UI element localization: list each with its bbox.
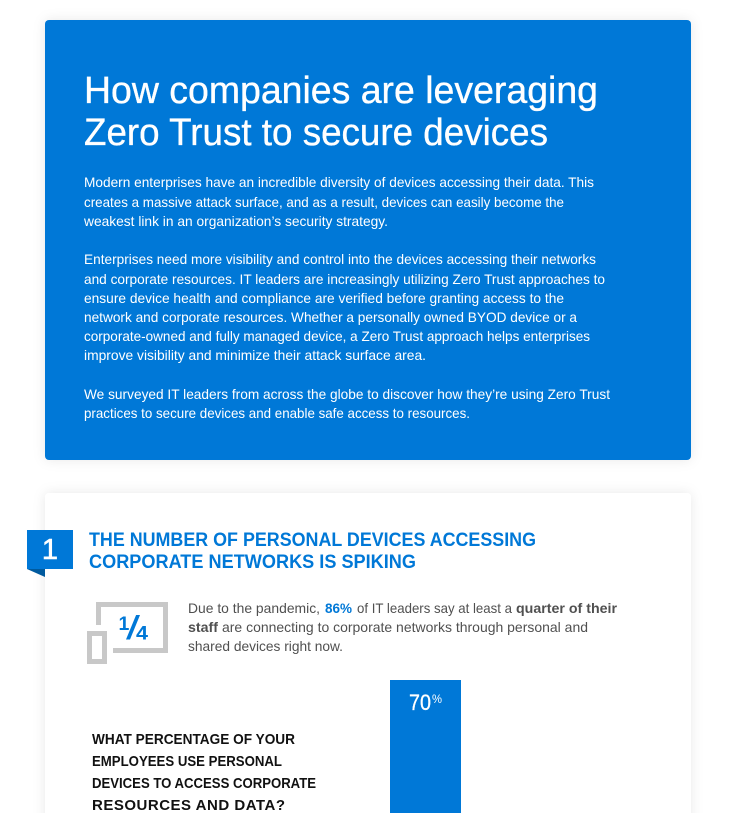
bar chart: 70 percent bar: % [432, 692, 442, 706]
text block: pandemic statistic: are connecting to corporate networks through personal and [222, 619, 588, 635]
panel: section 1 card [45, 493, 691, 813]
text block: intro paragraph 2: and corporate resources. IT leaders are increasingly utilizing Zero Trust approaches to [84, 271, 605, 287]
text block: intro paragraph 1 [83, 174, 594, 229]
survey question [92, 731, 316, 813]
bar chart: 70 percent bar: 70 [409, 690, 431, 715]
text block: pandemic statistic: Due to the pandemic, [188, 600, 320, 616]
text block: intro paragraph 1: weakest link in an organization’s security strategy. [83, 213, 388, 229]
text block: pandemic statistic [188, 600, 618, 654]
text block: intro paragraph 2: ensure device health and compliance are verified before granting access to the [84, 290, 564, 306]
title [84, 70, 598, 154]
number badge: 1 [42, 534, 58, 566]
title: Zero Trust to secure devices [84, 112, 548, 154]
text block: intro paragraph 2: Enterprises need more visibility and control into the devices accessing their networks [84, 251, 596, 267]
text block: intro paragraph 3: practices to secure devices and enable safe access to resources. [84, 405, 470, 421]
text block: pandemic statistic: shared devices right now. [188, 638, 343, 654]
survey question: WHAT PERCENTAGE OF YOUR [92, 731, 295, 748]
text block: pandemic statistic: staff [188, 619, 218, 635]
panel: introduction [45, 20, 691, 460]
section heading: THE NUMBER OF PERSONAL DEVICES ACCESSING [89, 530, 536, 551]
text block: intro paragraph 1: Modern enterprises have an incredible diversity of devices accessing their data. This [84, 174, 594, 190]
bar chart: 70 percent bar [390, 680, 461, 813]
text block: pandemic statistic: 86% [325, 600, 353, 616]
section heading: CORPORATE NETWORKS IS SPIKING [89, 552, 416, 573]
text block: intro paragraph 2: corporate-owned and fully managed device, a Zero Trust approach helps enterprises [84, 328, 590, 344]
survey question: DEVICES TO ACCESS CORPORATE [92, 775, 316, 792]
title: How companies are leveraging [84, 70, 598, 112]
section heading [89, 530, 536, 573]
icon: monitor and tablet with one quarter: 1 [118, 613, 130, 635]
text block: pandemic statistic: quarter of their [516, 600, 618, 616]
icon: monitor and tablet with one quarter: / [126, 609, 141, 646]
number badge [27, 530, 73, 577]
text block: intro paragraph 2: improve visibility and minimize their attack surface area. [84, 347, 426, 363]
text block: intro paragraph 2 [84, 251, 605, 363]
text block: intro paragraph 3 [84, 386, 610, 421]
icon: monitor and tablet with one quarter: 4 [136, 622, 148, 644]
icon: monitor and tablet with one quarter [90, 604, 166, 662]
text block: intro paragraph 2: network and corporate resources. Whether a personally owned BYOD device or a [84, 309, 577, 325]
text block: intro paragraph 1: creates a massive attack surface, and as a result, devices can easily become the [84, 194, 564, 210]
text block: pandemic statistic: of IT leaders say at least a [357, 600, 512, 616]
text block: intro paragraph 3: We surveyed IT leaders from across the globe to discover how they’re using Zero Trust [84, 386, 610, 402]
survey question: EMPLOYEES USE PERSONAL [92, 753, 282, 770]
